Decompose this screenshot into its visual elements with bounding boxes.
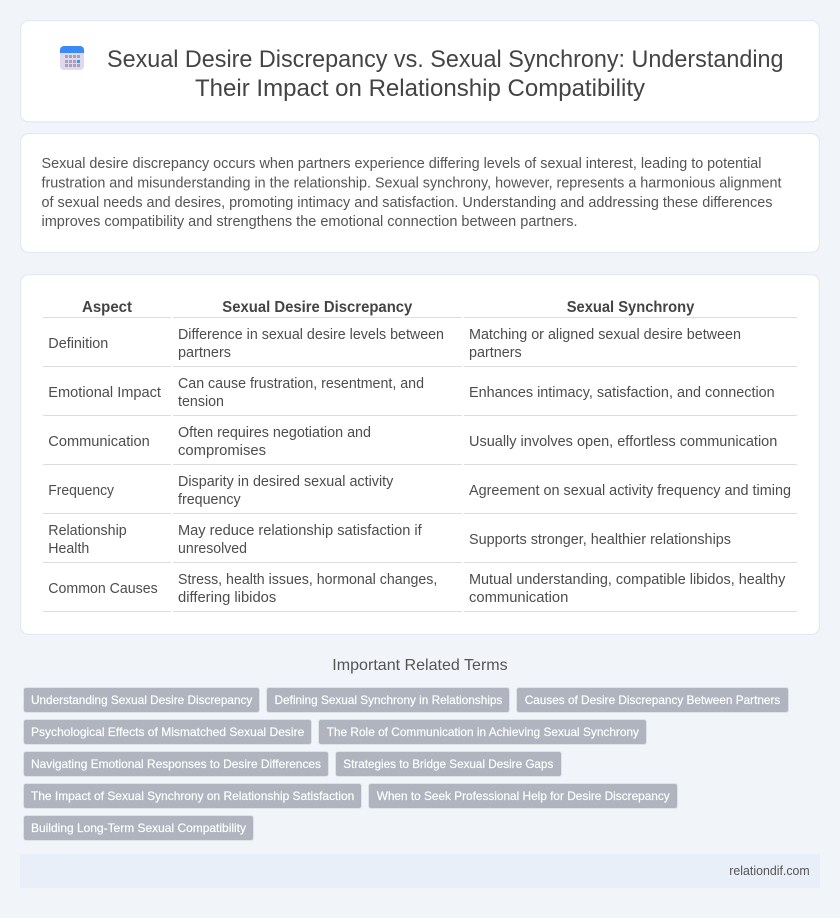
footer: relationdif.com: [729, 864, 810, 878]
tag: Strategies to Bridge Sexual Desire Gaps: [343, 757, 553, 771]
tag: [368, 784, 678, 808]
table row: common causes: communication: [469, 590, 568, 606]
text block: introduction: Sexual desire discrepancy occurs when partners experience differing levels of sexual interest, leading to potential: [42, 156, 762, 172]
tag: Understanding Sexual Desire Discrepancy: [31, 693, 252, 707]
table row: frequency: Frequency: [48, 483, 115, 499]
tag: [24, 784, 362, 808]
table row: emotional impact: Enhances intimacy, satisfaction, and connection: [469, 385, 775, 401]
panel: introduction paragraph: [21, 134, 819, 252]
table row: common causes: Mutual understanding, compatible libidos, healthy: [469, 572, 786, 588]
tag: [336, 752, 562, 776]
tag: [266, 688, 510, 712]
table row: communication: Often requires negotiation and: [178, 425, 371, 441]
table row: emotional impact: [48, 376, 775, 410]
table row: common causes: Common Causes: [48, 581, 158, 597]
table row: communication: compromises: [178, 443, 266, 459]
title: Sexual Desire Discrepancy vs. Sexual Synchrony: Understanding: [107, 46, 784, 73]
text block: introduction: frustration and misunderstanding in the relationship. Sexual synchrony, however, represents a harmonious alignment: [42, 176, 782, 192]
tag: [24, 688, 260, 712]
table header row: Aspect: [82, 299, 133, 316]
table row: definition: [48, 327, 741, 361]
table header row: [82, 299, 694, 316]
tag: Defining Sexual Synchrony in Relationships: [274, 693, 502, 707]
table header row: Sexual Desire Discrepancy: [222, 299, 412, 316]
tag: The Role of Communication in Achieving Sexual Synchrony: [327, 725, 639, 739]
tag: Causes of Desire Discrepancy Between Partners: [525, 693, 780, 707]
table row: definition: partners: [469, 345, 522, 361]
title: Their Impact on Relationship Compatibility: [195, 75, 645, 102]
table row: emotional impact: Emotional Impact: [48, 385, 161, 401]
table row: frequency: [48, 474, 791, 508]
panel: title header: [21, 21, 819, 122]
table row: emotional impact: tension: [178, 394, 224, 410]
tag list: related terms: [24, 688, 788, 840]
text block: introduction: [42, 156, 782, 230]
text block: introduction: improves compatibility and strengthens the emotional connection between partners.: [42, 214, 578, 230]
table row: common causes: Stress, health issues, hormonal changes,: [178, 572, 437, 588]
table row: relationship health: unresolved: [178, 541, 247, 557]
tag: Building Long-Term Sexual Compatibility: [31, 821, 246, 835]
table row: frequency: Disparity in desired sexual activity: [178, 474, 394, 490]
table row: relationship health: Relationship: [48, 523, 127, 539]
table row: common causes: [48, 572, 786, 606]
panel: comparison table: [21, 275, 819, 634]
table header row: Sexual Synchrony: [567, 299, 694, 316]
title: [107, 46, 784, 102]
table row: relationship health: May reduce relationship satisfaction if: [178, 523, 423, 539]
tag: When to Seek Professional Help for Desire Discrepancy: [377, 789, 670, 803]
icon: calendar: [60, 46, 84, 70]
footer: [20, 854, 820, 888]
tag: The Impact of Sexual Synchrony on Relationship Satisfaction: [31, 789, 354, 803]
table row: relationship health: Health: [48, 541, 89, 557]
table row: communication: Communication: [48, 434, 150, 450]
table row: definition: partners: [178, 345, 231, 361]
table row: communication: Usually involves open, effortless communication: [469, 434, 777, 450]
table row: communication: [48, 425, 777, 459]
tag: Navigating Emotional Responses to Desire Differences: [31, 757, 321, 771]
tag: [516, 688, 788, 712]
table row: relationship health: Supports stronger, healthier relationships: [469, 532, 731, 548]
table row: frequency: frequency: [178, 492, 241, 508]
tag: [318, 720, 646, 744]
tag: [24, 752, 328, 776]
table row: frequency: Agreement on sexual activity frequency and timing: [469, 483, 791, 499]
tag: Psychological Effects of Mismatched Sexual Desire: [31, 725, 305, 739]
table row: definition: Definition: [48, 336, 108, 352]
heading: important related terms: Important Related Terms: [332, 657, 508, 674]
table row: relationship health: [48, 523, 731, 557]
table row: definition: Difference in sexual desire levels between: [178, 327, 444, 343]
text block: introduction: of sexual needs and desires, promoting intimacy and satisfaction. Understanding and addressing these differences: [42, 195, 772, 211]
tag: [24, 720, 312, 744]
tag: [24, 816, 254, 840]
table row: definition: Matching or aligned sexual desire between: [469, 327, 741, 343]
table row: common causes: differing libidos: [178, 590, 276, 606]
table row: emotional impact: Can cause frustration, resentment, and: [178, 376, 424, 392]
